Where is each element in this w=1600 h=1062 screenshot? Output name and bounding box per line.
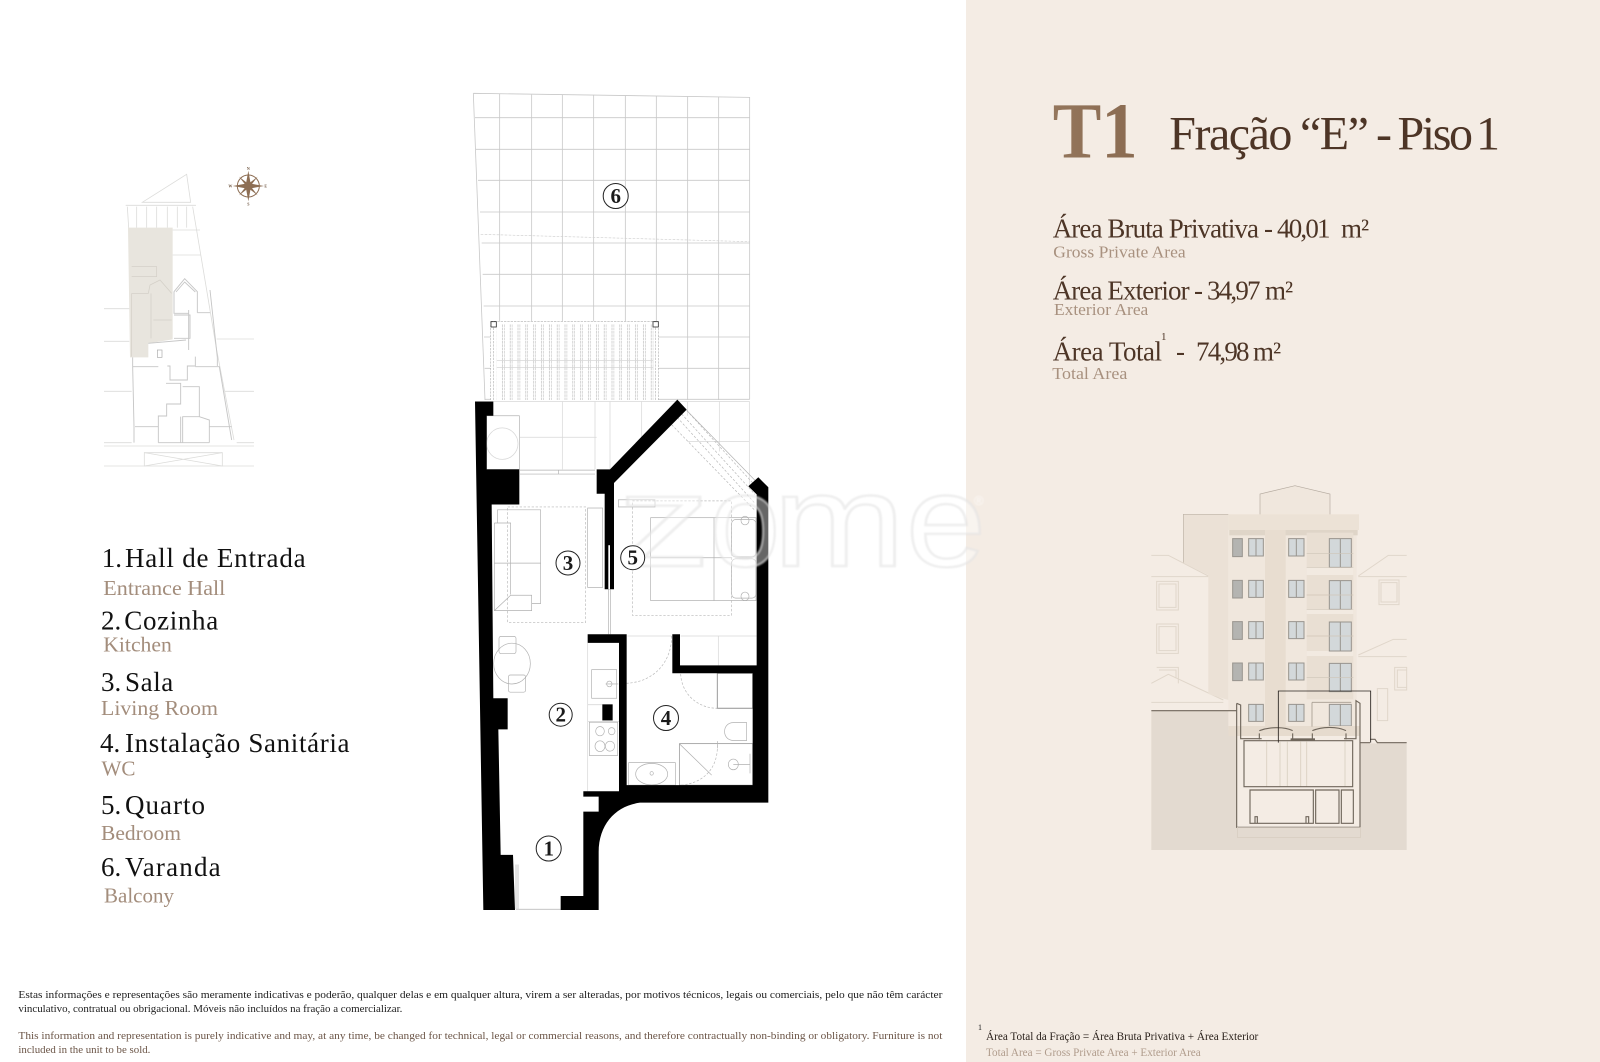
icon: compass rose: E <box>264 184 267 189</box>
room legend: Varanda <box>125 852 222 882</box>
room legend: Balcony <box>104 883 174 907</box>
disclaimer text: included in the unit to be sold. <box>18 1044 151 1056</box>
watermark: zome logo: z <box>617 447 711 594</box>
site plan with shaded unit location <box>104 166 267 466</box>
footnote: total area formula: 1 <box>978 1023 982 1032</box>
area figures: Total Area <box>1052 364 1128 383</box>
heading: Fração E - Piso 1: “E” <box>1300 107 1368 160</box>
panel: right beige info panel <box>966 0 1600 1062</box>
room number markers: 1 <box>543 836 554 860</box>
unit highlight frame <box>1278 691 1371 743</box>
area figures: Área Bruta Privativa <box>1053 214 1259 244</box>
watermark: zome logo <box>617 447 986 594</box>
disclaimer text: This information and representation is purely indicative and may, at any time, be changed for technical, legal or commercial reasons, and therefore contractually non-binding or obligatory. Furniture is not <box>18 1030 942 1042</box>
area figures: 1 <box>1161 331 1166 343</box>
heading: Fração E - Piso 1 <box>1169 107 1498 160</box>
pergola <box>491 321 658 400</box>
heading: Fração E - Piso 1: Piso <box>1398 107 1472 160</box>
disclaimer text: Estas informações e representações são meramente indicativas e poderão, qualquer delas e em qualquer altura, virem a ser alteradas, por motivos técnicos, legais ou comerciais, pelo que não têm carácter <box>18 989 943 1001</box>
room number markers: 5 <box>627 546 638 570</box>
walls: left wall <box>475 401 519 910</box>
watermark: zome logo: o <box>710 447 780 594</box>
area figures: m² <box>1253 337 1281 367</box>
room legend: 4. <box>100 728 120 758</box>
room legend: WC <box>102 757 136 781</box>
room legend: 1. <box>102 543 122 573</box>
footnote: total area formula: Área Total da Fração = Área Bruta Privativa + Área Exterior <box>986 1029 1258 1043</box>
icon: compass rose: W <box>228 184 232 189</box>
area figures: - <box>1264 214 1273 244</box>
room legend: Hall de Entrada <box>125 543 306 573</box>
watermark: zome logo: m <box>773 447 905 594</box>
watermark: zome logo: e <box>906 447 986 594</box>
heading: T1: T1 <box>1053 88 1138 175</box>
room legend: Bedroom <box>101 821 181 845</box>
room legend: Cozinha <box>124 606 219 636</box>
room number markers: 6 <box>610 184 621 208</box>
watermark: zome logo: ® <box>974 493 984 508</box>
heading: Fração E - Piso 1: 1 <box>1476 107 1498 160</box>
area figures: Área Total <box>1053 337 1162 367</box>
room number markers: 2 <box>555 703 566 727</box>
area figures <box>1052 214 1369 383</box>
area figures: 40,01 <box>1277 214 1329 244</box>
area figures: Exterior Area <box>1054 300 1149 319</box>
footnote: total area formula <box>978 1023 1258 1059</box>
room legend: Kitchen <box>103 633 172 657</box>
area figures: 34,97 <box>1207 275 1260 305</box>
room number markers <box>536 184 678 861</box>
room legend: Instalação Sanitária <box>125 728 350 758</box>
room legend: Entrance Hall <box>103 576 225 600</box>
heading: Fração E - Piso 1: - <box>1376 107 1391 160</box>
room number markers: 4 <box>661 706 672 730</box>
icon: compass rose <box>228 166 267 206</box>
building section illustration <box>1151 486 1407 850</box>
icon: compass rose: S <box>247 201 250 206</box>
room legend: Living Room <box>101 696 218 720</box>
balcony grid and pergola (area 6) <box>473 93 750 400</box>
area figures: Área Exterior <box>1053 275 1190 305</box>
room legend <box>100 543 350 907</box>
room legend: 5. <box>101 790 121 820</box>
disclaimer text <box>18 989 943 1056</box>
disclaimer text: vinculativo, contratual ou obrigacional. Móveis não incluídos na fração a comercializar. <box>18 1003 403 1015</box>
footnote: total area formula: Total Area = Gross Private Area + Exterior Area <box>986 1047 1201 1059</box>
floor plan <box>475 400 768 910</box>
room legend: Sala <box>125 667 174 697</box>
area figures: - <box>1176 337 1185 367</box>
room legend: 2. <box>101 606 121 636</box>
area figures: m² <box>1341 214 1369 244</box>
room legend: Quarto <box>125 790 206 820</box>
room legend: 6. <box>101 852 121 882</box>
room legend: 3. <box>101 667 121 697</box>
walls: central partition <box>597 400 687 720</box>
section outline <box>1151 701 1407 827</box>
area figures: - <box>1194 275 1203 305</box>
icon: compass rose: N <box>247 166 250 171</box>
walls: bedroom, bathroom and entrance walls <box>561 477 768 910</box>
windows <box>1233 539 1353 726</box>
room number markers: 3 <box>563 551 573 575</box>
area figures: m² <box>1265 275 1293 305</box>
area figures: Gross Private Area <box>1053 243 1186 262</box>
area figures: 74,98 <box>1196 337 1249 367</box>
heading: Fração E - Piso 1: Fração <box>1169 107 1291 160</box>
furniture and fixtures <box>487 410 758 909</box>
